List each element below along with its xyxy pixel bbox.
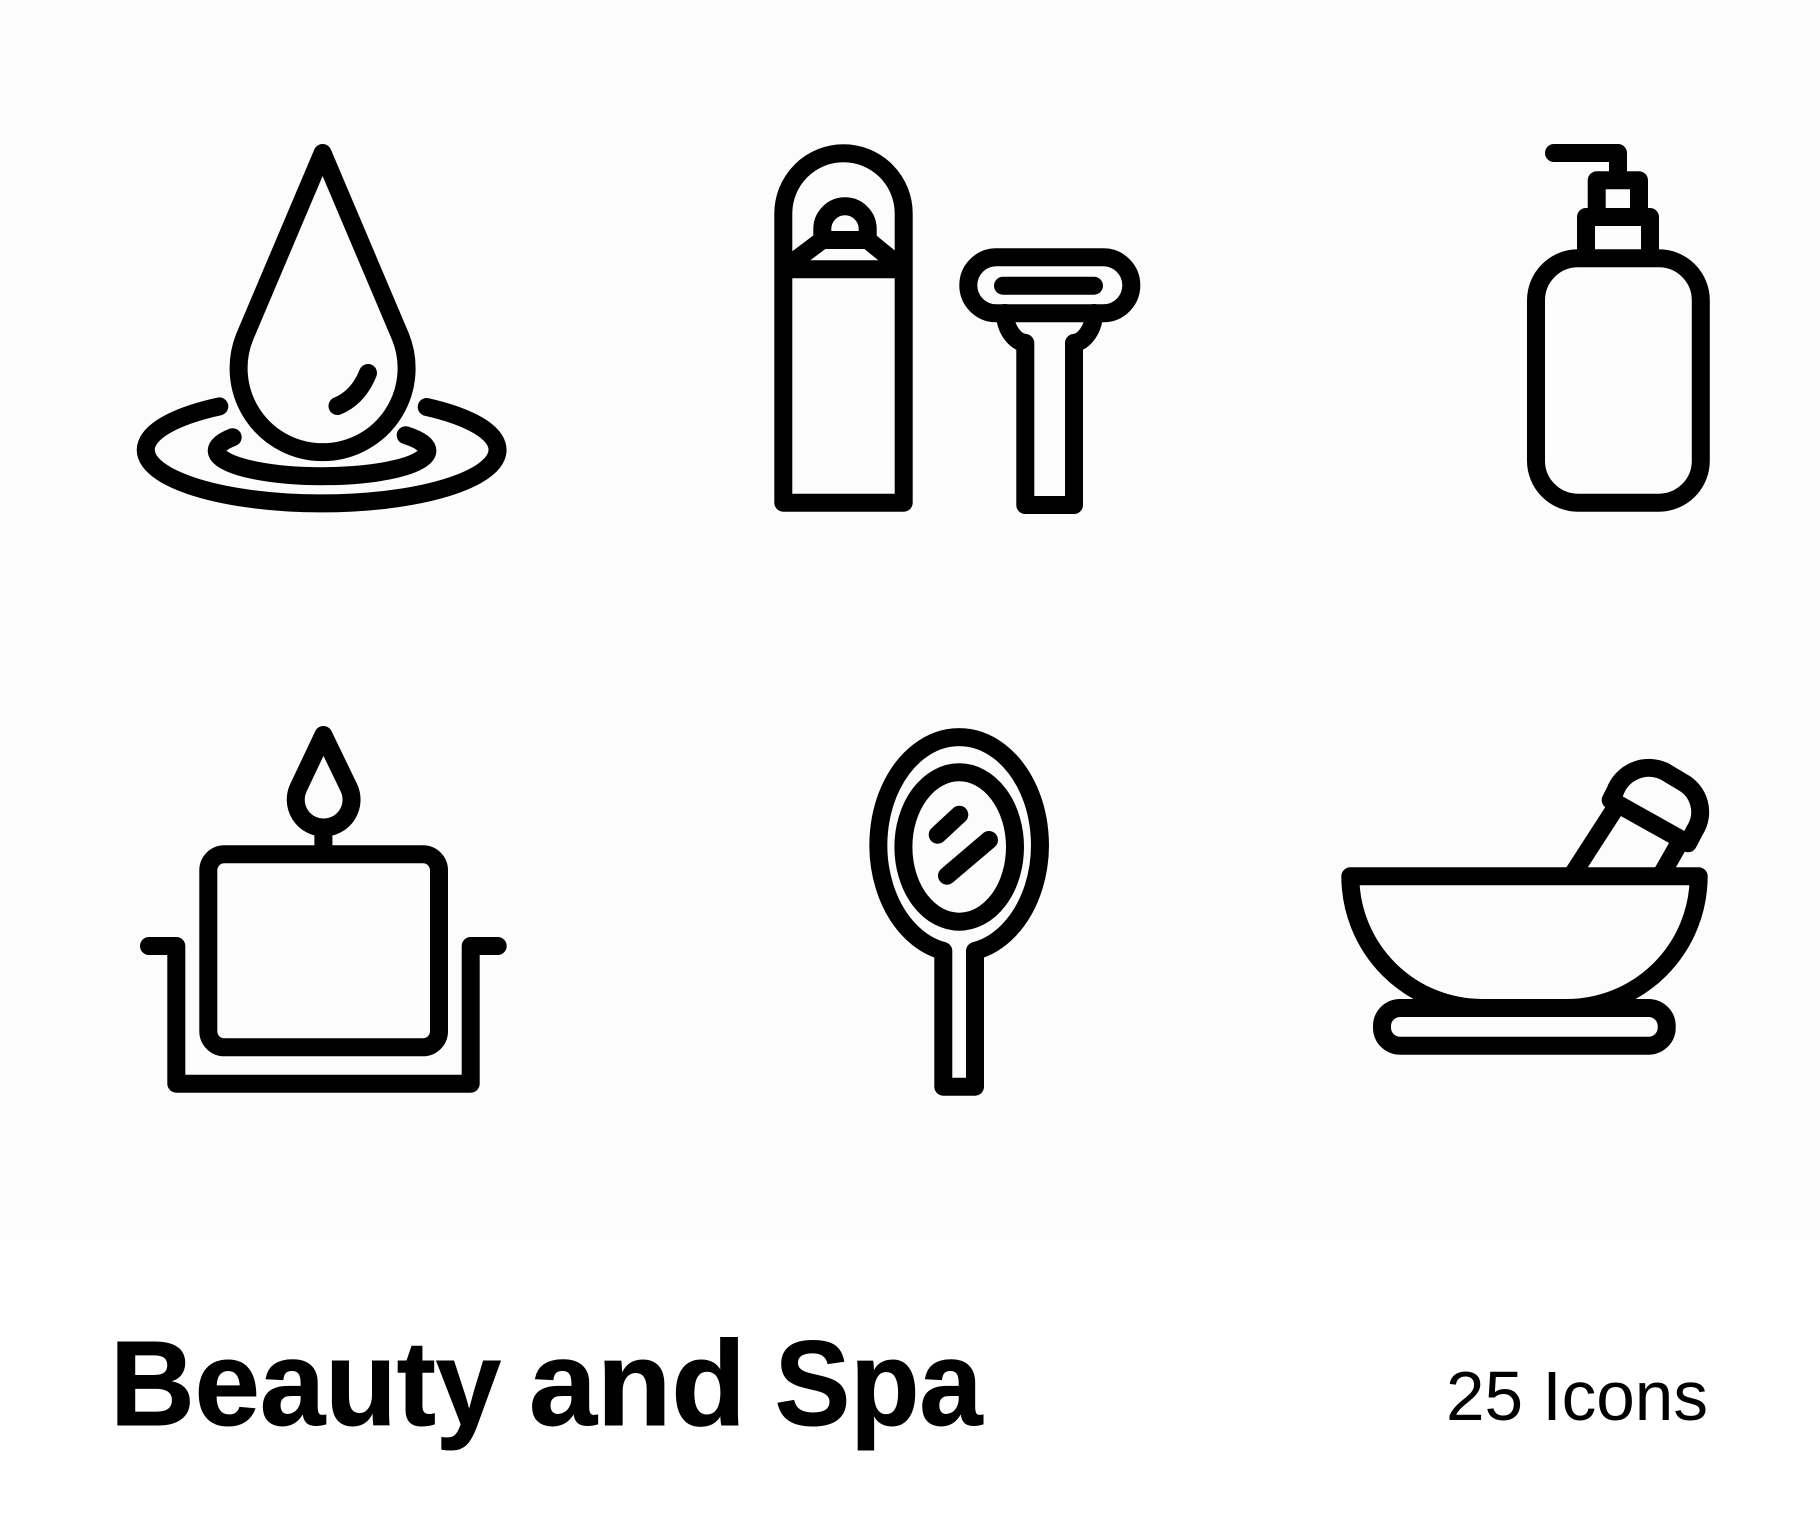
icon: razor <box>968 257 1131 505</box>
icon: candle in tray <box>149 735 498 1084</box>
title <box>110 1315 984 1451</box>
icon: mortar and pestle <box>1350 768 1700 1046</box>
title: Spa <box>775 1315 984 1451</box>
icon: pump bottle <box>1536 153 1701 503</box>
icon: hand mirror <box>878 737 1040 1087</box>
title: and <box>529 1315 746 1451</box>
title: Beauty <box>110 1315 501 1451</box>
icon: spray can <box>783 153 904 503</box>
icon: water drop with ripples <box>146 153 498 503</box>
icon count label: 25 Icons <box>1446 1357 1708 1435</box>
